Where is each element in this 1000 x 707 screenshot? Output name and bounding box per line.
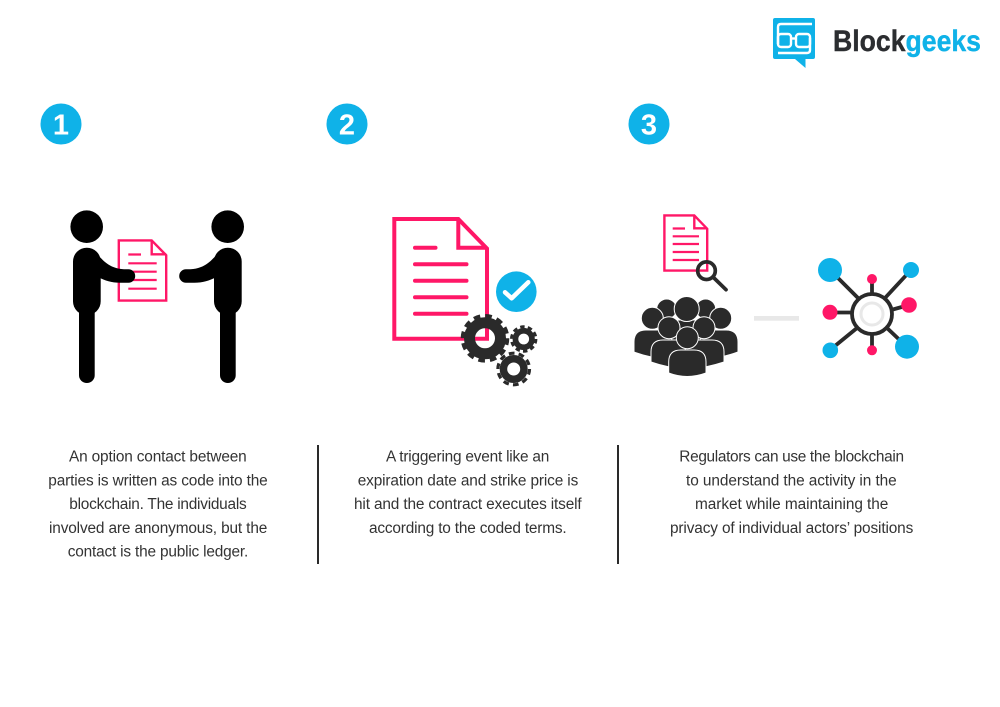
text block: step 3 description: Regulators can use the blockchain	[679, 448, 904, 466]
icon: check mark badge	[496, 271, 537, 312]
divider between step 1 and step 2	[317, 445, 319, 564]
icon: network hub	[818, 258, 919, 359]
badge: step 3	[628, 104, 670, 144]
logo wordmark: Blockgeeks	[833, 25, 981, 58]
text block: step 2 description	[354, 448, 582, 537]
text block: step 1 description: contact is the public ledger.	[68, 544, 248, 561]
badge: step 2: 2	[339, 110, 355, 142]
text block: step 1 description: An option contact between	[69, 448, 247, 466]
icon: crowd of people	[634, 296, 738, 376]
text block: step 1 description	[48, 448, 268, 561]
illustration: regulators and network	[634, 215, 919, 376]
badge: step 1	[40, 104, 82, 144]
text block: step 2 description: hit and the contract executes itself	[354, 496, 582, 513]
illustration: self-executing contract	[394, 219, 537, 385]
text block: step 3 description: privacy of individual actors’ positions	[670, 520, 914, 537]
icon: small contract document	[664, 215, 707, 271]
logo: Blockgeeks	[773, 18, 981, 68]
badge: step 3: 3	[641, 110, 657, 142]
text block: step 3 description: market while maintaining the	[695, 496, 888, 513]
badge: step 1: 1	[53, 110, 69, 142]
icon: person right	[179, 210, 244, 383]
icon: person left	[70, 210, 135, 383]
badge: step 2	[326, 104, 368, 144]
illustration: two people exchanging a contract	[70, 210, 244, 383]
text block: step 3 description	[670, 448, 914, 537]
icon: gears	[463, 316, 536, 385]
divider between step 2 and step 3	[617, 445, 619, 564]
icon: large contract document	[394, 219, 487, 339]
text block: step 1 description: parties is written as code into the	[48, 472, 268, 489]
text block: step 1 description: involved are anonymous, but the	[49, 520, 267, 537]
icon: magnifying glass	[698, 262, 726, 290]
text block: step 3 description: to understand the activity in the	[686, 472, 897, 489]
text block: step 1 description: blockchain. The individuals	[69, 496, 247, 513]
text block: step 2 description: according to the coded terms.	[369, 520, 567, 537]
text block: step 2 description: expiration date and strike price is	[358, 472, 579, 489]
icon: speech bubble with glasses	[773, 18, 815, 68]
icon: contract document	[119, 240, 166, 301]
connector dash	[754, 316, 799, 321]
text block: step 2 description: A triggering event like an	[386, 448, 549, 466]
